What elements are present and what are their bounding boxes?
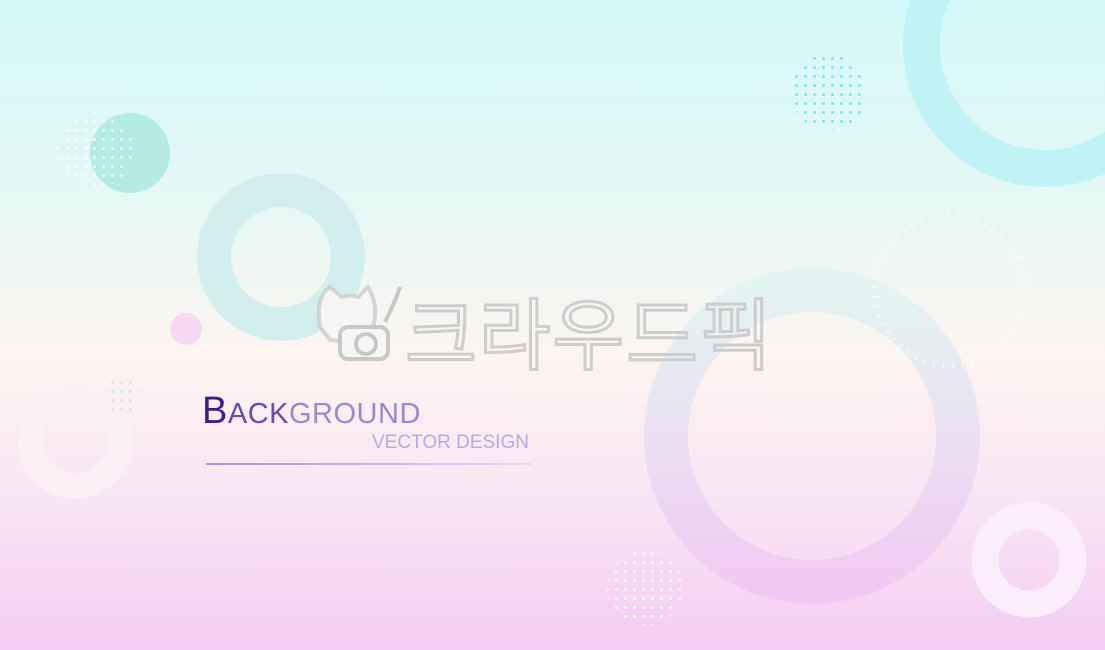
watermark logo bbox=[316, 284, 764, 371]
underline bbox=[206, 463, 532, 464]
white dots bottom bbox=[607, 550, 683, 626]
white dots top left bbox=[57, 112, 133, 188]
heading: BACKGROUND bbox=[202, 390, 421, 432]
ring left bbox=[30, 396, 120, 486]
big ring bbox=[666, 290, 958, 582]
dots left small bbox=[104, 378, 140, 414]
ring bottom right bbox=[985, 516, 1073, 604]
teal ring bbox=[214, 190, 348, 324]
dot cluster top right bbox=[791, 54, 867, 130]
subheading: VECTOR DESIGN bbox=[372, 432, 529, 453]
pink small dot bbox=[170, 313, 202, 345]
title bbox=[202, 390, 532, 465]
icon: cat with camera bbox=[316, 284, 402, 361]
ring top right bbox=[922, 0, 1105, 168]
teal circle top left bbox=[90, 113, 170, 193]
faint dot ring right bbox=[875, 215, 1025, 365]
